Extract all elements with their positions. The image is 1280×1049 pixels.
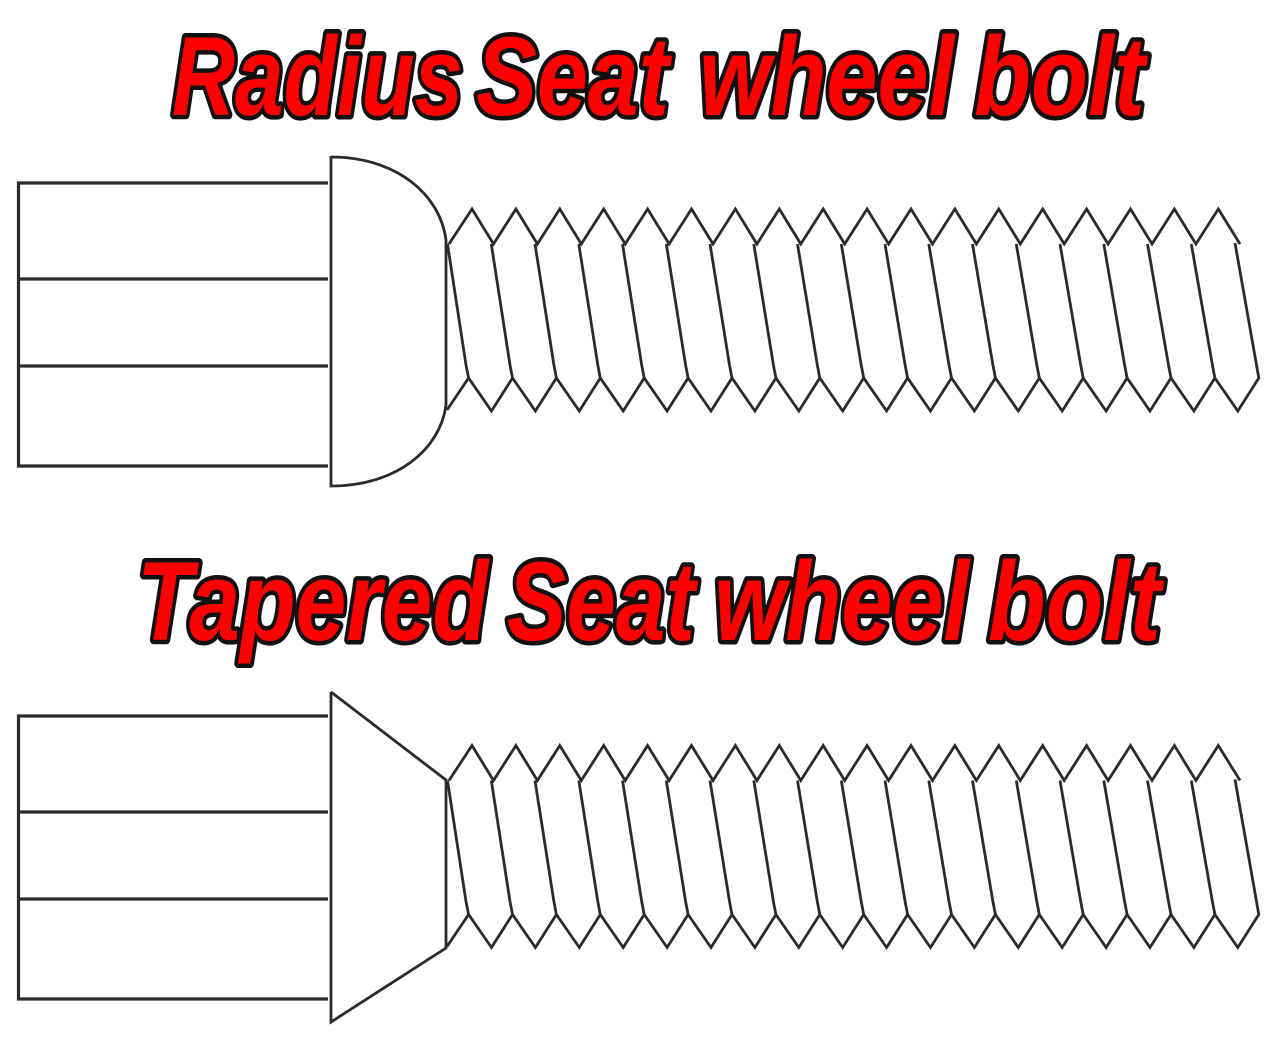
- tapered seat head: [331, 692, 446, 1022]
- rounded radius seat head: [331, 156, 446, 486]
- title: Radius Seat wheel bolt: bolt: [974, 14, 1149, 139]
- title: Radius Seat wheel bolt: [172, 14, 1149, 139]
- title: Tapered Seat wheel bolt: Tapered: [137, 539, 490, 664]
- title: Radius Seat wheel bolt: Seat: [476, 14, 673, 139]
- title: Tapered Seat wheel bolt: wheel: [714, 539, 971, 664]
- title: Tapered Seat wheel bolt: Seat: [507, 539, 699, 664]
- diagram: tapered seat wheel bolt: [18, 692, 1259, 1022]
- threads: [447, 746, 1259, 948]
- title: Tapered Seat wheel bolt: bolt: [988, 539, 1165, 664]
- title: Radius Seat wheel bolt: wheel: [699, 14, 956, 139]
- title: Radius Seat wheel bolt: Radius: [172, 14, 463, 139]
- threads: [447, 209, 1259, 411]
- title: Tapered Seat wheel bolt: [137, 539, 1165, 664]
- diagram: radius seat wheel bolt: [18, 156, 1259, 486]
- bolt hex shank: [18, 183, 328, 466]
- bolt hex shank: [18, 716, 328, 999]
